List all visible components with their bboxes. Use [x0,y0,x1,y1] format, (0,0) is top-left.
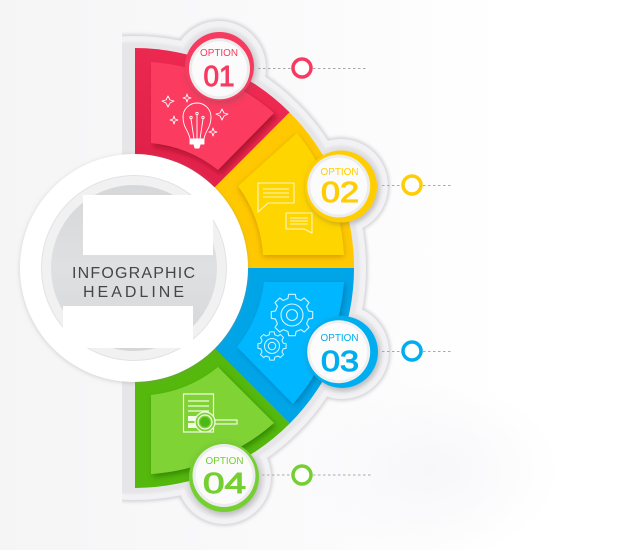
connector: option 03 [382,342,451,360]
grey outline behind the semicircle [122,18,392,527]
inner ring [42,176,226,360]
headline: INFOGRAPHIC [72,265,195,282]
green inner card [151,367,274,474]
icon: document with magnifier [184,394,237,432]
badge: option 03 [306,316,378,388]
connector: option 01 [258,59,366,77]
outer white ring [20,154,248,382]
badge: option 02 [305,150,377,222]
number: 01 [204,61,234,93]
connector: option 02 [382,176,451,194]
blue segment [134,268,354,424]
badge: option 04 [189,442,259,512]
yellow inner card [238,133,344,255]
number: 04 [203,468,246,500]
label: OPTION [200,48,238,59]
red inner card [151,62,274,170]
blue inner card [237,282,344,404]
label: OPTION [320,167,358,178]
yellow segment [134,112,354,268]
panel: option 02 [134,112,354,268]
number: 02 [321,177,359,209]
central circle with headline [20,154,248,382]
panel: option 03 [134,268,354,424]
green segment [135,268,290,488]
icon: gears [258,294,313,360]
grey disc [51,185,217,351]
icon: light bulb with sparkles [162,94,228,148]
icon: speech bubbles [258,183,312,233]
label: OPTION [320,333,358,344]
label: OPTION [206,456,244,467]
white patch bottom [63,306,193,348]
connector: option 04 [262,466,371,484]
red segment [135,48,290,268]
panel: option 01 [135,48,290,268]
panel: option 04 [135,268,290,488]
white patch top [83,195,213,255]
number: 03 [321,346,359,378]
headline second line: HEADLINE [83,284,184,301]
badge: option 01 [185,32,254,101]
